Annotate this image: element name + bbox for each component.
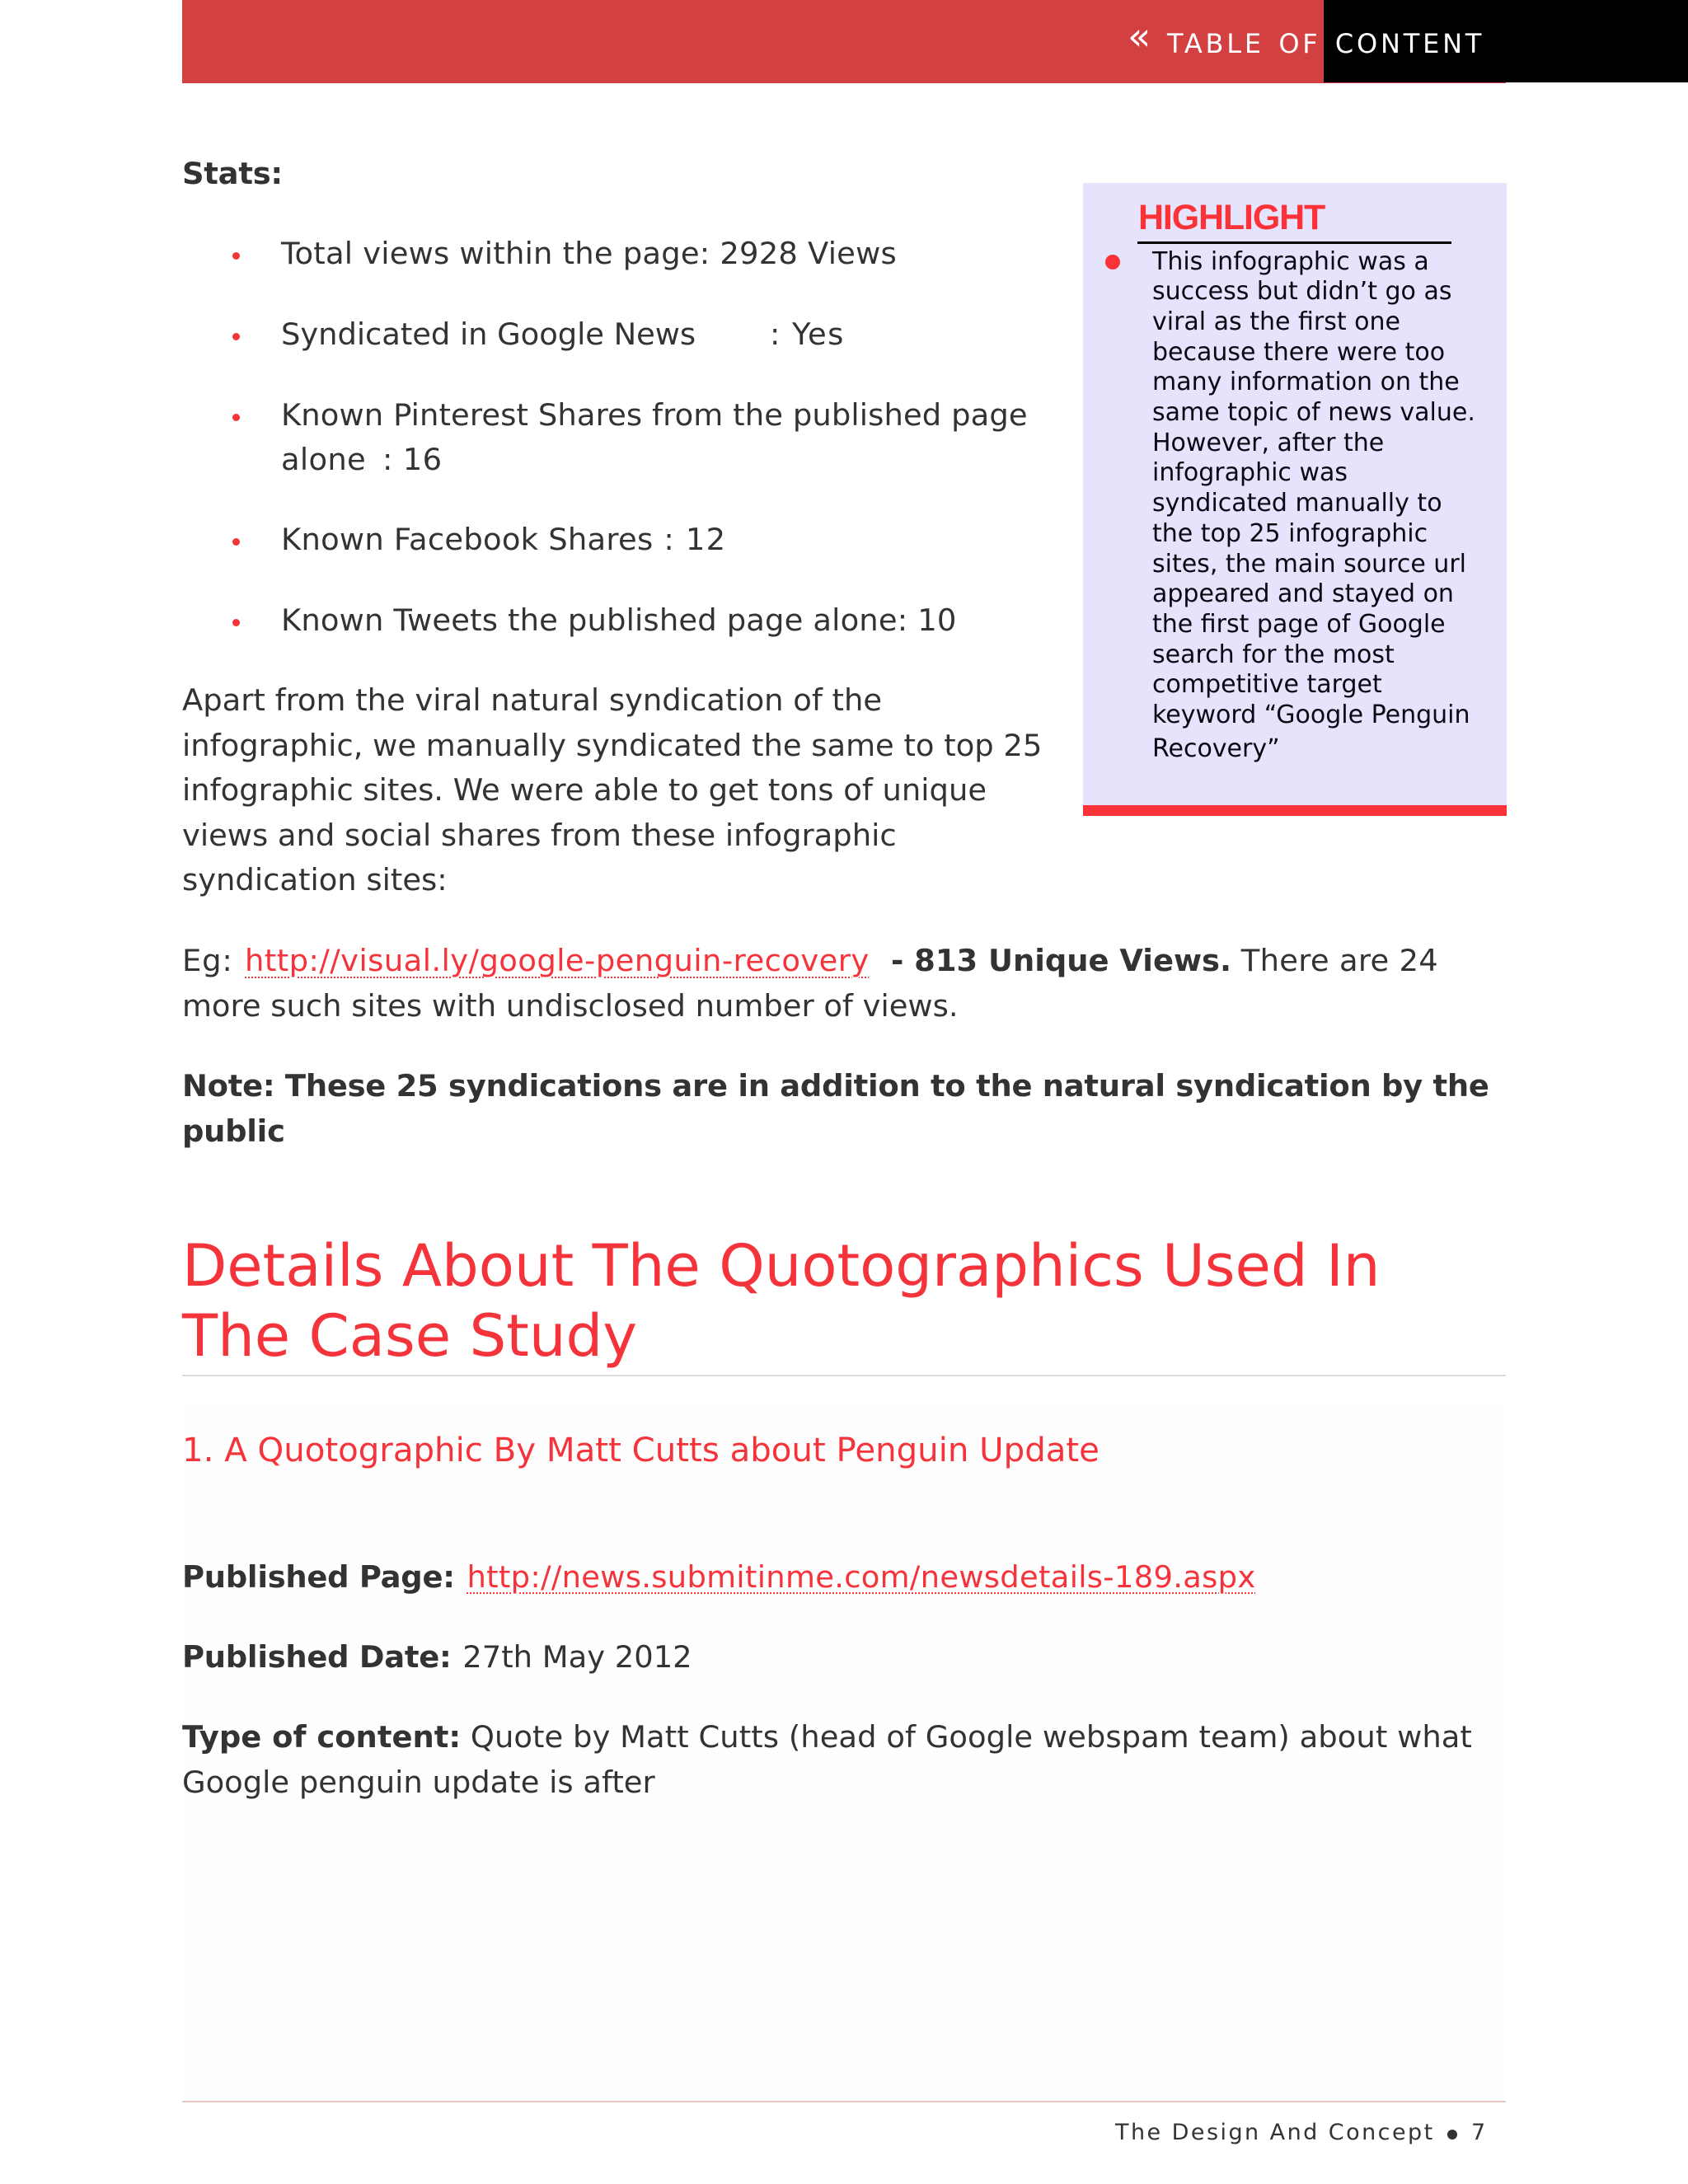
- published page: Published Page: http://news.submitinme.com/newsdetails-189.aspx: [182, 1559, 1256, 1594]
- type of content: Type of content: Quote by Matt Cutts (head of Google webspam team) about what: [182, 1719, 1472, 1755]
- highlight text: [1152, 247, 1475, 763]
- highlight text: competitive target: [1152, 670, 1382, 699]
- type of content: Google penguin update is after: [182, 1765, 655, 1800]
- highlight text: However, after the: [1152, 429, 1384, 457]
- paragraph: example link: [182, 943, 1438, 1024]
- highlight text: the first page of Google: [1152, 610, 1446, 639]
- highlight text: infographic was: [1152, 458, 1348, 487]
- highlight text: viral as the first one: [1152, 307, 1400, 336]
- highlight text: many information on the: [1152, 368, 1460, 396]
- paragraph: manual syndication: [182, 682, 1042, 898]
- paragraph: manual syndication: infographic sites. We were able to get tons of unique: [182, 772, 987, 808]
- subheading: 1. A Quotographic By Matt Cutts about Penguin Update: [182, 1431, 1100, 1469]
- section heading: The Case Study: [182, 1302, 637, 1370]
- footer rule: [182, 2101, 1506, 2102]
- highlight heading: HIGHLIGHT: [1138, 198, 1325, 237]
- bullet: total views: Total views within the page: 2928 Views: [281, 236, 897, 270]
- example views: - 813 Unique Views. There are 24: [891, 943, 1438, 978]
- highlight panel: [1083, 183, 1507, 816]
- bullet: pinterest shares: [232, 397, 1028, 477]
- highlight bullet: [1105, 255, 1120, 269]
- highlight text: success but didn’t go as: [1152, 277, 1451, 306]
- content background: [182, 1401, 1506, 2102]
- stats heading: Stats:: [182, 155, 283, 191]
- paragraph: manual syndication: Apart from the viral natural syndication of the: [182, 682, 882, 718]
- stats bullet list: : Yes: [770, 316, 845, 351]
- note: [182, 1068, 1489, 1149]
- paragraph: manual syndication: infographic, we manually syndicated the same to top 25: [182, 728, 1042, 763]
- highlight rule: [1137, 241, 1451, 244]
- highlight text: same topic of news value.: [1152, 398, 1475, 427]
- footer text: 7: [1471, 2120, 1488, 2145]
- header link: table of content: [1128, 14, 1484, 59]
- header link: table of content: «: [1128, 14, 1151, 59]
- header link: table of content: TABLE OF CONTENT: [1167, 28, 1484, 59]
- section heading: Details About The Quotographics Used In: [182, 1232, 1380, 1300]
- bullet: pinterest shares: Known Pinterest Shares from the published page: [281, 397, 1028, 432]
- stats bullet list: [232, 236, 1028, 638]
- published date: Published Date: 27th May 2012: [182, 1639, 692, 1675]
- highlight text: Recovery”: [1152, 734, 1280, 763]
- highlight text: appeared and stayed on: [1152, 579, 1454, 608]
- note: Note: These 25 syndications are in addition to the natural syndication by the: [182, 1068, 1489, 1104]
- section heading: [181, 1232, 1380, 1370]
- highlight text: syndicated manually to: [1152, 489, 1442, 518]
- example label: Eg:: [182, 943, 233, 978]
- bullet: google news: [232, 316, 845, 351]
- footer text: The Design And Concept: [1115, 2120, 1435, 2145]
- header black tab: [1324, 0, 1688, 82]
- type of content: [182, 1719, 1472, 1800]
- highlight text: because there were too: [1152, 338, 1445, 367]
- bullet: google news: Syndicated in Google News: [281, 316, 696, 351]
- highlight text: keyword “Google Penguin: [1152, 701, 1470, 729]
- section divider: [182, 1375, 1506, 1376]
- paragraph: manual syndication: syndication sites:: [182, 862, 448, 898]
- example url: http://visual.ly/google-penguin-recovery: [245, 943, 870, 978]
- bullet: facebook shares: Known Facebook Shares : 12: [281, 521, 726, 557]
- highlight text: sites, the main source url: [1152, 550, 1466, 579]
- bullet: pinterest shares: alone : 16: [281, 442, 442, 477]
- highlight text: the top 25 infographic: [1152, 519, 1428, 548]
- header bar: [182, 0, 1506, 83]
- paragraph: manual syndication: views and social shares from these infographic: [182, 818, 897, 853]
- note: public: [182, 1113, 285, 1149]
- bullet: tweets: Known Tweets the published page alone: 10: [281, 602, 956, 638]
- highlight text: search for the most: [1152, 640, 1395, 669]
- highlight text: This infographic was a: [1152, 247, 1429, 275]
- highlight bottom bar: [1083, 805, 1507, 816]
- example continuation: more such sites with undisclosed number of views.: [182, 988, 959, 1024]
